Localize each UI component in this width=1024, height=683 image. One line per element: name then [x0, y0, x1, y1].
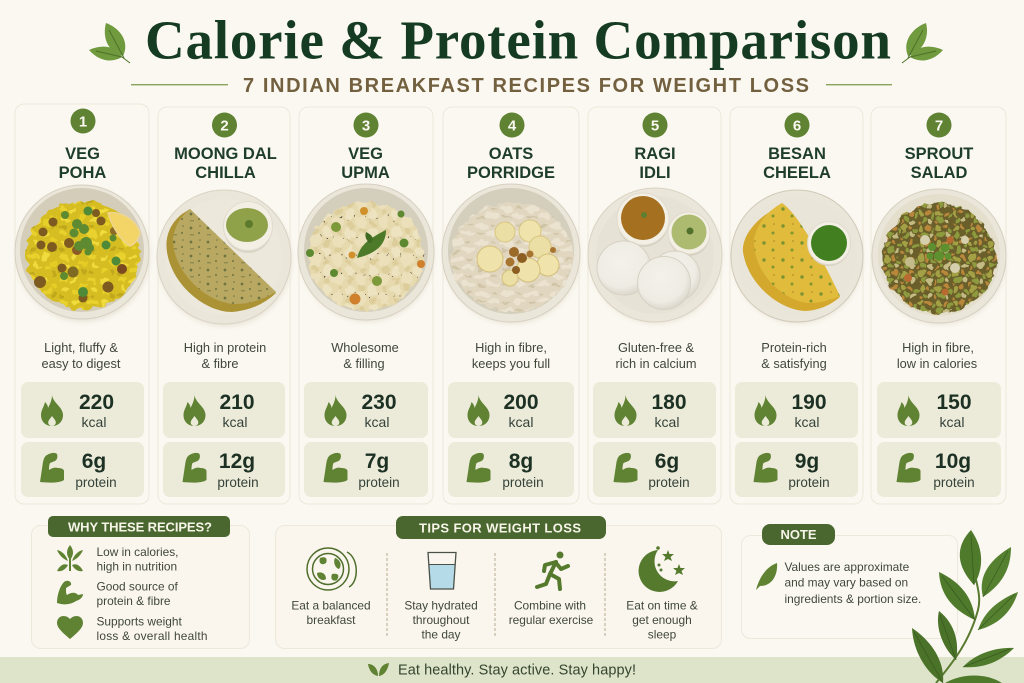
food image: upma bowl: [298, 184, 434, 321]
note text: and may vary based on: [784, 576, 908, 590]
card 1: veg poha: [15, 104, 149, 504]
icon: runner: [537, 552, 568, 589]
reason 2: protein & fibre: [96, 594, 171, 608]
number 5: 5: [651, 118, 659, 134]
calories stat: [735, 382, 858, 438]
reason 1: Low in calories,: [96, 545, 178, 559]
protein stat: 9g: [795, 450, 819, 473]
tip 1: breakfast: [307, 613, 356, 627]
protein stat: 12g: [219, 450, 255, 473]
calories stat: [593, 382, 716, 438]
recipe name: PORRIDGE: [467, 164, 555, 182]
calories stat: kcal: [795, 414, 819, 430]
calories stat: [877, 382, 1001, 438]
card 3: veg upma: [298, 107, 434, 504]
protein stat: [21, 442, 144, 497]
protein stat: 6g: [82, 450, 106, 473]
calories stat: kcal: [940, 414, 964, 430]
calories stat: 230: [361, 391, 397, 414]
reason 2: Good source of: [96, 580, 178, 594]
note text: ingredients & portion size.: [784, 592, 921, 606]
calories stat: [163, 382, 285, 438]
icon: plate: [307, 548, 356, 590]
food image: poha bowl: [15, 185, 149, 321]
heading pill: [396, 516, 606, 539]
panel: tips for weight loss: [276, 516, 722, 648]
heading pill: [762, 524, 835, 545]
heading pill: [48, 516, 230, 537]
calories stat: 200: [503, 391, 539, 414]
food image: sprout bowl: [872, 189, 1006, 324]
recipe name: SPROUT: [905, 145, 973, 163]
tip 2: throughout: [413, 613, 470, 627]
reason 3: Supports weight: [96, 614, 182, 628]
protein stat: [448, 442, 574, 497]
heading pill: WHY THESE RECIPES?: [68, 520, 212, 534]
icon: water glass: [428, 552, 456, 589]
heading pill: TIPS FOR WEIGHT LOSS: [419, 520, 581, 536]
calories stat: [21, 382, 144, 438]
calories stat: [448, 382, 574, 438]
subtitle rule right: [826, 84, 892, 85]
icon: plant: [57, 545, 83, 571]
note text: Values are approximate: [784, 560, 910, 574]
protein stat: 7g: [365, 450, 389, 473]
benefit: Protein-rich: [761, 340, 827, 355]
protein stat: [593, 442, 716, 497]
recipe name: OATS: [489, 145, 533, 163]
icon: leaf: [756, 563, 777, 590]
food image: idli plate: [588, 188, 722, 323]
footer text: Eat healthy. Stay active. Stay happy!: [398, 662, 636, 678]
protein stat: protein: [75, 475, 117, 490]
protein stat: 6g: [655, 450, 679, 473]
icon: arm: [57, 581, 83, 604]
number 6: 6: [793, 118, 801, 134]
calories stat: 190: [791, 391, 827, 414]
number 3: 3: [362, 118, 370, 134]
food image: chilla plate: [157, 190, 291, 326]
decorative leaves: title left: [89, 23, 130, 63]
number 3: [354, 112, 378, 138]
tip 4: Eat on time &: [626, 598, 698, 612]
protein stat: [735, 442, 858, 497]
protein stat: [304, 442, 428, 497]
recipe name: MOONG DAL: [174, 145, 277, 163]
protein stat: [163, 442, 285, 497]
benefit: Gluten-free &: [618, 340, 695, 355]
calories stat: [304, 382, 428, 438]
garnish: [70, 219, 94, 256]
recipe name: BESAN: [768, 145, 826, 163]
benefit: Light, fluffy &: [44, 340, 118, 355]
number 2: [212, 112, 237, 138]
recipe name: VEG: [348, 145, 383, 163]
icon: heart: [57, 616, 83, 639]
recipe name: UPMA: [341, 164, 390, 182]
recipe name: CHEELA: [763, 164, 831, 182]
food image: cheela plate: [731, 190, 863, 323]
icon: moon and stars: [639, 546, 685, 592]
protein stat: protein: [788, 475, 830, 490]
benefit: & fibre: [202, 356, 238, 371]
benefit: Wholesome: [331, 340, 399, 355]
panel: why these recipes: [32, 516, 250, 648]
recipe name: CHILLA: [195, 164, 256, 182]
benefit: High in fibre,: [475, 340, 547, 355]
number 1: [70, 108, 96, 134]
calories stat: 210: [219, 391, 255, 414]
icon: footer leaves: [368, 663, 389, 676]
protein stat: protein: [358, 475, 400, 490]
tip 2: the day: [421, 628, 461, 642]
protein stat: 8g: [509, 450, 533, 473]
protein stat: protein: [217, 475, 259, 490]
card 5: ragi idli: [588, 107, 722, 504]
calories stat: kcal: [223, 414, 247, 430]
calories stat: kcal: [509, 414, 533, 430]
number 2: 2: [220, 118, 229, 134]
benefit: High in protein: [184, 340, 266, 355]
protein stat: [877, 442, 1001, 497]
tip 1: Eat a balanced: [291, 598, 371, 612]
card 4: oats porridge: [442, 107, 580, 504]
tip 4: sleep: [648, 628, 677, 642]
calories stat: kcal: [365, 414, 389, 430]
protein stat: protein: [933, 475, 975, 490]
reason 1: high in nutrition: [96, 560, 177, 574]
panel: note: [742, 524, 958, 638]
calories stat: 150: [936, 391, 972, 414]
number 4: 4: [508, 118, 517, 134]
number 1: 1: [79, 114, 87, 130]
benefit: keeps you full: [472, 356, 550, 371]
benefit: & filling: [343, 356, 385, 371]
decorative leaf branch: [912, 530, 1018, 683]
subtitle rule left: [131, 84, 228, 85]
protein stat: protein: [502, 475, 544, 490]
protein stat: 10g: [935, 450, 971, 473]
card 6: besan cheela: [730, 107, 863, 504]
recipe name: RAGI: [634, 145, 676, 163]
calories stat: kcal: [655, 414, 679, 430]
title: Calorie & Protein Comparison: [145, 10, 891, 70]
number 5: [642, 112, 668, 138]
benefit: easy to digest: [42, 356, 121, 371]
food image: oats bowl: [442, 184, 580, 323]
calories stat: 180: [651, 391, 687, 414]
benefit: rich in calcium: [615, 356, 697, 371]
recipe name: IDLI: [639, 164, 671, 182]
protein stat: protein: [648, 475, 690, 490]
benefit: High in fibre,: [902, 340, 974, 355]
tip 3: Combine with: [514, 598, 586, 612]
benefit: low in calories: [897, 356, 977, 371]
calories stat: 220: [79, 391, 114, 414]
number 4: [500, 112, 524, 138]
recipe name: VEG: [65, 145, 100, 163]
recipe name: POHA: [59, 164, 106, 182]
number 6: [784, 112, 810, 138]
subtitle: 7 INDIAN BREAKFAST RECIPES FOR WEIGHT LOSS: [243, 75, 809, 97]
benefit: & satisfying: [761, 356, 827, 371]
card 7: sprout salad: [871, 107, 1006, 504]
tip 4: get enough: [632, 613, 692, 627]
number 7: [926, 112, 952, 138]
decorative leaves: title right: [902, 23, 943, 63]
number 7: 7: [935, 118, 943, 134]
tip dividers: [387, 553, 605, 636]
heading pill: NOTE: [780, 527, 817, 542]
tip 3: regular exercise: [509, 613, 594, 627]
recipe name: SALAD: [911, 164, 967, 182]
calories stat: kcal: [82, 414, 106, 430]
reason 3: loss & overall health: [96, 629, 208, 643]
card 2: moong dal chilla: [157, 107, 291, 504]
footer band: [0, 657, 1024, 683]
tip 2: Stay hydrated: [404, 598, 478, 612]
